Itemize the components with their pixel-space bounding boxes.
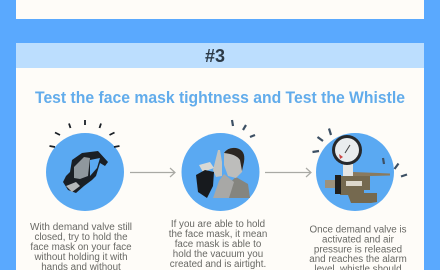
step 1: icon mask [46, 120, 124, 211]
arrow 2 [265, 168, 311, 177]
step 3: icon gauge [312, 128, 407, 211]
step 1 text [30, 222, 132, 270]
step 3 text: activated and air [322, 234, 395, 246]
step 2 text [169, 219, 267, 270]
panel: step 3 [16, 43, 424, 270]
step 3 text: and reaches the alarm [309, 254, 407, 265]
step 2 text: created and is airtight. [170, 259, 266, 270]
heading: Test the face mask tightness and Test the Whistle [35, 88, 405, 107]
previous panel bottom [16, 0, 424, 19]
step number header: #3 [205, 46, 225, 66]
step 2 text: If you are able to hold [171, 219, 265, 230]
step number header [16, 43, 424, 68]
step 1 text: With demand valve still [30, 222, 132, 233]
step 2: icon person [182, 120, 260, 211]
step 3 text [309, 224, 407, 270]
step 1 text: face mask on your face [30, 242, 132, 253]
step 2 text: hold the vacuum you [173, 249, 263, 260]
step 2 text: face mask is able to [175, 239, 262, 250]
step 2 text: the face mask, it mean [169, 229, 267, 240]
step 3 text: pressure is released [314, 244, 402, 256]
arrow 1 [130, 168, 175, 177]
step 1 text: closed, try to hold the [34, 232, 128, 243]
step 1 text: without holding it with [33, 252, 128, 263]
step 3 text: Once demand valve is [310, 224, 407, 236]
